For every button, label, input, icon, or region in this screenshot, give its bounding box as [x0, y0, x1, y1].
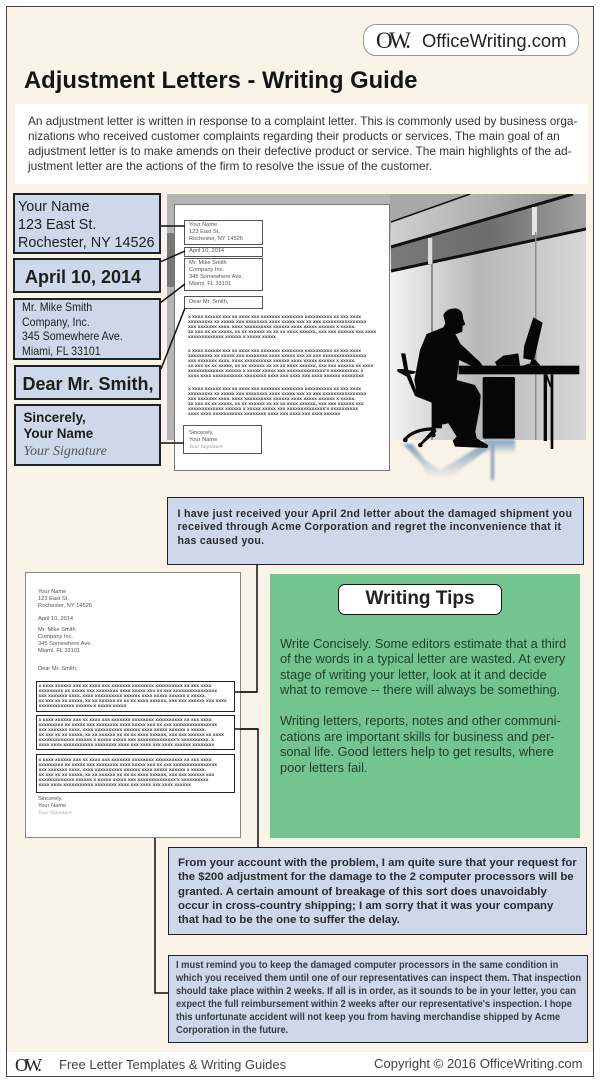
- highlighted paragraph one: x xxxx xxxxxx xxx xx xxxx xxx xxxxxxx xxxxxxxx xxxxxxxxxx xx xxx xxxx xxxxxxxxx xx xxxxx xxx xxxxxxxx xxxx xxxxx xxx xx xxx xxxxxxxxxxxxxxxx xxx xxxxxxx xxxx. xxxx xxxxxxxxxx xxxxxx xxxx xxxxx xxxxxx x xxxxx. xx xxx xx xx xxxxx, xx xx xxxxxx xx xx xx xxxx xxxxxx, xxx xxx xxxxxx xxx xxxx xxxxxxxxxxxxx xxxxxx x xxxxx xxxxx: [38, 684, 227, 709]
- salutation: Dear Mr. Smith,: [38, 666, 78, 672]
- callout: date: April 10, 2014: [25, 266, 141, 286]
- panel: writing tips: [270, 574, 580, 838]
- callout: recipient address: [13, 298, 161, 360]
- closing highlight: [183, 425, 262, 454]
- tips paragraph one: Write Concisely. Some editors estimate that a third of the words in a typical letter are wasted. At every stage of writing your letter, look at it and decide what to remove -- there will always be something.: [280, 636, 566, 697]
- connector lines: top letter: [161, 225, 186, 444]
- callout: date: [13, 258, 161, 293]
- footer bar: [6, 1052, 594, 1077]
- connector overlay: highlighted paragraphs: [235, 691, 258, 730]
- body paragraph three: x xxxx xxxxxx xxx xx xxxx xxx xxxxxxx xxxxxxxx xxxxxxxxxx xx xxx xxxx xxxxxxxxx xx xxxxx xxx xxxxxxxx xxxx xxxxx xxx xx xxx xxxxxxxxxxxxxxxx xxx xxxxxxx xxxx. xxxx xxxxxxxxxx xxxxxx xxxx xxxxx xxxxxx x xxxxx. xx xxx xx xx xxxxx, xx xx xxxxxx xx xx xx xxxx xxxxxx, xxx xxx xxxxxx xxx xxxxxxxxxxxxx xxxxxx x xxxxx xxxxx xxx xxxxxxxxxxxxxx'x xxxxxxxxxx xxxx xxxx xxxxxxxxxxx xxxxxxxx xxxx xxx xxxx xxx xxxx xxxxxx: [188, 387, 366, 417]
- sender highlight: [184, 220, 263, 245]
- title: Adjustment Letters - Writing Guide: [24, 67, 418, 94]
- silhouette: person at desk: [397, 308, 579, 449]
- callout: paragraph one: [167, 497, 584, 565]
- footer tagline: Free Letter Templates & Writing Guides: [59, 1057, 286, 1072]
- heading: writing tips: Writing Tips: [365, 588, 475, 609]
- heading: writing tips: [338, 584, 502, 615]
- callout: salutation: [14, 365, 161, 400]
- logo mark: OW.: [376, 28, 407, 53]
- highlighted paragraph three: x xxxx xxxxxx xxx xx xxxx xxx xxxxxxx xxxxxxxx xxxxxxxxxx xx xxx xxxx xxxxxxxxx xx xxxxx xxx xxxxxxxx xxxx xxxxx xxx xx xxx xxxxxxxxxxxxxxxx xxx xxxxxxx xxxx. xxxx xxxxxxxxxx xxxxxx xxxx xxxxx xxxxxx x xxxxx. xx xxx xx xx xxxxx, xx xx xxxxxx xx xx xx xxxx xxxxxx, xxx xxx xxxxxx xxx xxxxxxxxxxxxx xxxxxx x xxxxx xxxxx xxx xxxxxxxxxxxxxx'x xxxxxxxxxx xxxx xxxx xxxxxxxxxxx xxxxxxxx xxxx xxx xxxx xxx xxxx xxxxxx: [38, 758, 217, 788]
- callout: paragraph two: From your account with the problem, I am quite sure that your request for the $200 adjustment for the damage to the 2 computer processors will be granted. A certain amount of breakage of this sort does unavoidably occur in cross-country shipping; I am sorry that it was your company that had to be the one to suffer the delay.: [178, 857, 577, 926]
- connector lines: body paragraphs to callouts: [154, 565, 259, 994]
- closing highlight: Sincerely, Your Name Your Signature: [189, 430, 223, 450]
- site name: OfficeWriting.com: [422, 30, 566, 51]
- callout: salutation: Dear Mr. Smith,: [22, 374, 154, 394]
- body paragraph two: x xxxx xxxxxx xxx xx xxxx xxx xxxxxxx xxxxxxxx xxxxxxxxxx xx xxx xxxx xxxxxxxxx xx xxxxx xxx xxxxxxxx xxxx xxxxx xxx xx xxx xxxxxxxxxxxxxxxx xxx xxxxxxx xxxx. xxxx xxxxxxxxxx xxxxxx xxxx xxxxx xxxxxx x xxxxx. xx xxx xx xx xxxxx, xx xx xxxxxx xx xx xx xxxx xxxxxx, xxx xxx xxxxxx xx xxxx xxxxxxxxxxxxx xxxxxx x xxxxx xxxxx xxx xxxxxxxxxxxxxx'x xxxxxxxxxx. x xxxx xxxx xxxxxxxxxxx xxxxxxxx xxxx xxx xxxx xxx xxxx xxxxxx xxxxxxxx: [188, 349, 373, 379]
- date: April 10, 2014: [38, 616, 73, 622]
- recipient highlight: Mr. Mike Smith Company Inc. 345 Somewhere Ave. Miami, FL 33101: [189, 260, 243, 287]
- recipient highlight: [184, 258, 263, 291]
- date highlight: [184, 247, 263, 257]
- closing: Sincerely, Your Name Your Signature: [38, 796, 72, 816]
- footer logo: OW.: [15, 1055, 39, 1075]
- callout: paragraph one: I have just received your April 2nd letter about the damaged shipment you received through Acme Corporation and regret the inconvenience that it has caused you.: [178, 508, 572, 547]
- salutation highlight: [184, 296, 263, 309]
- date highlight: April 10, 2014: [189, 248, 224, 254]
- salutation highlight: Dear Mr. Smith,: [189, 299, 229, 305]
- office photo illustration: [167, 194, 586, 482]
- body paragraph one: x xxxx xxxxxx xxx xx xxxx xxx xxxxxxx xxxxxxxx xxxxxxxxxx xx xxx xxxx xxxxxxxxx xx xxxxx xxx xxxxxxxx xxxx xxxxx xxx xx xxx xxxxxxxxxxxxxxxx xxx xxxxxxx xxxx. xxxx xxxxxxxxxx xxxxxx xxxx xxxxx xxxxxx x xxxxx. xx xxx xx xx xxxxx, xx xx xxxxxx xx xx xx xxxx xxxxxx, xxx xxx xxxxxx xxx xxxx xxxxxxxxxxxxx xxxxxx x xxxxx xxxxx: [188, 315, 376, 340]
- highlighted paragraph two: x xxxx xxxxxx xxx xx xxxx xxx xxxxxxx xxxxxxxx xxxxxxxxxx xx xxx xxxx xxxxxxxxx xx xxxxx xxx xxxxxxxx xxxx xxxxx xxx xx xxx xxxxxxxxxxxxxxxx xxx xxxxxxx xxxx. xxxx xxxxxxxxxx xxxxxx xxxx xxxxx xxxxxx x xxxxx. xx xxx xx xx xxxxx, xx xx xxxxxx xx xx xx xxxx xxxxxx, xxx xxx xxxxxx xx xxxx xxxxxxxxxxxxx xxxxxx x xxxxx xxxxx xxx xxxxxxxxxxxxxx'x xxxxxxxxxx. x xxxx xxxx xxxxxxxxxxx xxxxxxxx xxxx xxx xxxx xxx xxxx xxxxxx xxxxxxxx: [38, 718, 224, 748]
- copyright: Copyright © 2016 OfficeWriting.com: [374, 1056, 583, 1071]
- callout: sender address: Your Name 123 East St. Rochester, NY 14526: [18, 198, 155, 251]
- sample letter: anatomy: [174, 204, 390, 471]
- address block: Your Name 123 East St. Rochester, NY 14526: [38, 589, 92, 609]
- callout: recipient address: Mr. Mike Smith Company, Inc. 345 Somewhere Ave. Miami, FL 33101: [22, 300, 123, 358]
- floor reflection: [403, 440, 515, 480]
- intro paragraph: An adjustment letter is written in response to a complaint letter. This is commonly used by business orga- nizations who received customer complaints regarding their products or services. The main goal of an adjustment letter is to make amends on their defective product or service. The main highlights of the ad- justment letter are the actions of the firm to resolve the issue of the customer.: [28, 114, 577, 173]
- logo badge: OfficeWriting.com: [363, 24, 579, 56]
- callout: closing: [14, 404, 161, 466]
- recipient: Mr. Mike Smith Company Inc. 345 Somewhere Ave. Miami, FL 33101: [38, 627, 92, 654]
- callout: closing: Sincerely, Your Name Your Signature: [24, 410, 107, 459]
- intro text panel: [15, 104, 588, 184]
- sender highlight: Your Name 123 East St. Rochester, NY 14526: [189, 222, 243, 242]
- callout: paragraph three: I must remind you to keep the damaged computer processors in the same condition in which you received them until one of our representatives can inspect them. That inspection should take place within 2 weeks. If all is in order, as it sounds to be in your letter, you can expect the full reimbursement within 2 weeks after our representative's inspection. I hope this unfortunate accident will not keep you from having merchandise shipped by Acme Corporation in the future.: [176, 960, 581, 1036]
- sample letter: paragraphs highlighted: [25, 572, 241, 838]
- tips paragraph two: Writing letters, reports, notes and other communi- cations are important skills for business and per- sonal life. Good letters help to get results, where poor letters fail.: [280, 713, 561, 775]
